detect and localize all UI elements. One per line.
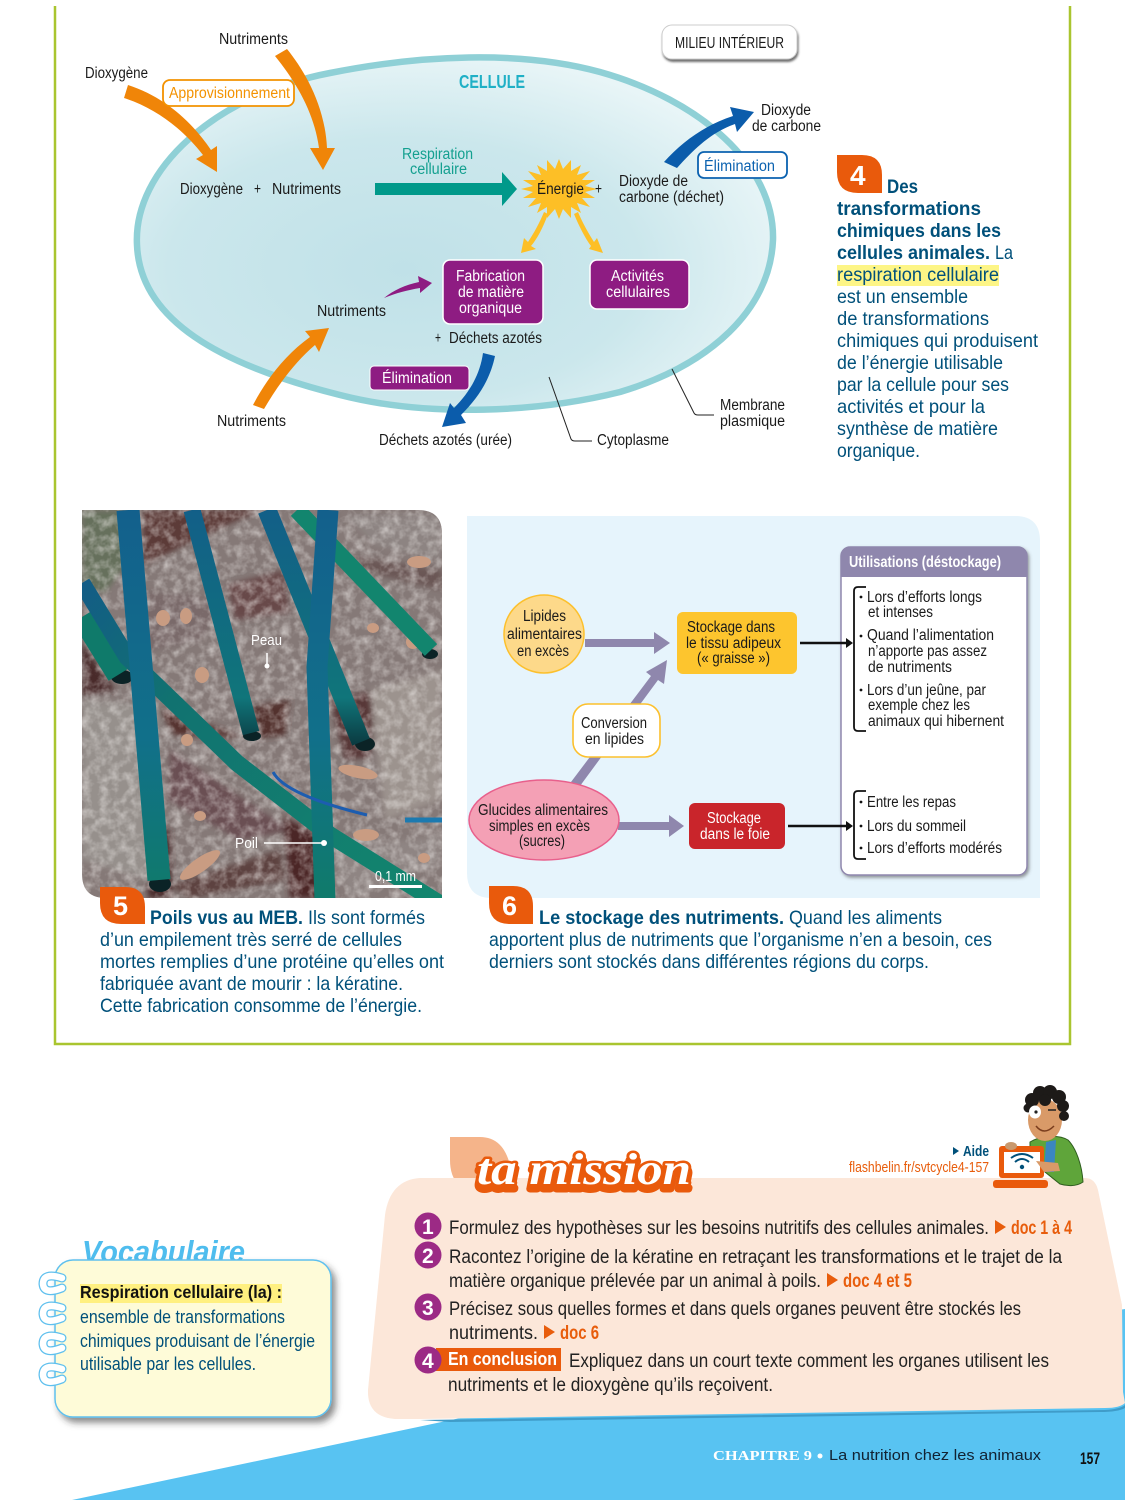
label: milieu intérieur: MILIEU INTÉRIEUR: [675, 35, 784, 52]
box: activités cellulaires: cellulaires: [606, 284, 670, 301]
arrow: nutriments from bottom: [217, 328, 329, 430]
flakes: [145, 556, 431, 884]
doc 4 text: activités et pour la: [837, 396, 985, 418]
arrow: respiration cellulaire: [375, 146, 517, 206]
title: vocabulaire: Vocabulaire: [82, 1234, 245, 1269]
doc 4 text: La: [995, 242, 1013, 264]
node: stockage tissu adipeux: Stockage dans: [687, 619, 775, 636]
note card: [55, 1260, 331, 1417]
question 4: Expliquez dans un court texte comment les organes utilisent les: [569, 1351, 1049, 1372]
label: déchets azotés: Déchets azotés: [449, 330, 542, 347]
box: activités cellulaires: Activités: [611, 268, 664, 285]
node: stockage foie: dans le foie: [700, 826, 770, 843]
node: glucides: (sucres): [519, 833, 565, 850]
panel: utilisations: Quand l’alimentation: [867, 627, 994, 644]
label: poil: [236, 837, 327, 848]
footer: chapter: CHAPITRE 9: [713, 1449, 812, 1464]
badge 6: [489, 886, 533, 924]
arrow: dioxygène from left: [85, 65, 217, 172]
diagram: cell: [85, 25, 821, 449]
number 4: [414, 1346, 442, 1374]
question 1: Formulez des hypothèses sur les besoins nutritifs des cellules animales.: [449, 1218, 989, 1239]
aide link: [849, 1144, 989, 1176]
panel: utilisations: Lors d’efforts longs: [867, 589, 982, 606]
footer: chapter: La nutrition chez les animaux: [829, 1447, 1042, 1464]
question 2: Racontez l’origine de la kératine en retraçant les transformations et le trajet de la: [449, 1247, 1062, 1268]
node: stockage foie: Stockage: [707, 810, 761, 827]
doc 5 caption: Cette fabrication consomme de l’énergie.: [100, 995, 422, 1017]
highlight: [837, 265, 999, 286]
doc 6 caption: [489, 886, 992, 973]
aide link: Aide: [963, 1144, 989, 1160]
doc 6 caption: Le stockage des nutriments.: [539, 907, 784, 929]
node: glucides: Glucides alimentaires: [478, 802, 608, 819]
title: ta mission: ta mission: [477, 1150, 691, 1199]
panel shadow: [420, 1405, 1125, 1422]
arrow: carbs conversion: [571, 660, 667, 786]
doc 4 text: [837, 155, 1039, 462]
products: +: [595, 181, 602, 198]
node: lipides: alimentaires: [507, 626, 582, 643]
panel: utilisations: animaux qui hibernent: [868, 713, 1005, 730]
panel: utilisations: Lors d’efforts modérés: [867, 840, 1002, 857]
arrows: energy to boxes: [521, 212, 603, 253]
label: membrane plasmique: [672, 369, 785, 430]
node: glucides: [469, 780, 619, 860]
arrow: lipids to adipose: [585, 632, 670, 654]
question 3: [449, 1299, 1021, 1344]
panel: utilisations: Lors d’un jeûne, par: [867, 682, 986, 699]
box: fabrication de matière organique: Fabrication: [456, 268, 525, 285]
question 4: [448, 1351, 1049, 1396]
doc 5 caption: fabriquée avant de mourir : la kératine.: [100, 973, 403, 995]
node: stockage tissu adipeux: (« graisse »): [697, 650, 770, 667]
cell membrane and cytoplasm: [137, 57, 773, 410]
scale bar: 0,1 mm: [375, 869, 416, 885]
reactants: Nutriments: [272, 181, 341, 198]
badge 5: [100, 887, 145, 924]
question 1: doc 1 à 4: [1011, 1218, 1072, 1239]
en conclusion tag: En conclusion: [448, 1349, 557, 1369]
arrow: respiration cellulaire: cellulaire: [410, 161, 467, 178]
doc 6 caption: Quand les aliments: [789, 907, 942, 929]
node: glucides: simples en excès: [489, 818, 590, 835]
doc 4 text: chimiques qui produisent: [837, 330, 1039, 352]
products: [595, 173, 724, 206]
doc 5 caption: Poils vus au MEB.: [150, 907, 303, 929]
doc 4 text: organique.: [837, 440, 920, 462]
definition text: ensemble de transformations: [80, 1307, 285, 1327]
diagram: nutrient storage: [467, 516, 1040, 898]
icon: energy star: Énergie: [537, 181, 584, 198]
arrow: déchets out: Déchets azotés (urée): [379, 432, 512, 449]
doc 6 caption: apportent plus de nutriments que l’organisme n’en a besoin, ces: [489, 929, 992, 951]
panel: vocabulaire: [43, 1234, 331, 1417]
arrow: respiration cellulaire: Respiration: [402, 146, 473, 163]
panel background: [368, 1178, 1125, 1419]
node: lipides: en excès: [517, 643, 569, 660]
brackets: [854, 587, 866, 859]
label: approvisionnement: Approvisionnement: [169, 85, 291, 102]
node: conversion: [573, 704, 660, 757]
question 3: nutriments.: [449, 1323, 538, 1344]
label: cellule: CELLULE: [459, 72, 525, 92]
box: activités cellulaires: [590, 260, 689, 309]
arrow: carbs to liver: [618, 815, 684, 837]
question 4: nutriments et le dioxygène qu’ils reçoivent.: [448, 1375, 773, 1396]
doc 4 text: est un ensemble: [837, 286, 968, 308]
doc 4 text: transformations: [837, 198, 981, 220]
panel: utilisations: Utilisations (déstockage): [849, 554, 1001, 571]
question 2: matière organique prélevée par un animal à poils.: [449, 1271, 821, 1292]
icon: character with laptop: [993, 1085, 1083, 1188]
badge 6: 6: [502, 891, 517, 921]
badge 4: 4: [850, 160, 866, 191]
box: fabrication de matière organique: [443, 260, 543, 324]
arrow: dioxygène from left: Dioxygène: [85, 65, 148, 82]
green page frame: [55, 6, 1070, 1044]
label: poil: Poil: [235, 835, 258, 852]
hairs: [111, 649, 438, 892]
box: fabrication de matière organique: organique: [459, 300, 522, 317]
scale bar: [369, 871, 422, 888]
label: nutriments: Nutriments: [317, 303, 386, 320]
label: cytoplasme: Cytoplasme: [597, 432, 669, 449]
arrow: nutriments from top: [219, 31, 335, 170]
doc 4 text: Des: [887, 176, 918, 198]
label: membrane plasmique: plasmique: [720, 413, 785, 430]
arrow: nutriments to fabrication: [384, 276, 432, 298]
aide link: flashbelin.fr/svtcycle4-157: [849, 1160, 989, 1176]
doc 5 caption: mortes remplies d’une protéine qu’elles ont: [100, 951, 445, 973]
definition text: [80, 1282, 315, 1374]
rings: [43, 1276, 62, 1382]
number 2: [414, 1242, 442, 1268]
panel: ta mission: [368, 1085, 1125, 1422]
doc 4 text: chimiques dans les: [837, 220, 1001, 242]
node: lipides: Lipides: [523, 608, 566, 625]
panel: utilisations: Entre les repas: [867, 794, 956, 811]
panel: utilisations: exemple chez les: [868, 697, 970, 714]
number 4: 4: [422, 1350, 434, 1373]
node: lipides: [504, 595, 584, 673]
panel: utilisations: de nutriments: [868, 659, 952, 676]
question 3: Précisez sous quelles formes et dans quels organes peuvent être stockés les: [449, 1299, 1021, 1320]
node: conversion: en lipides: [585, 731, 644, 748]
icon: energy star: [521, 159, 597, 219]
reactants: Dioxygène: [180, 181, 243, 198]
definition text: Respiration cellulaire (la) :: [80, 1282, 282, 1302]
arrow: nutriments from bottom: Nutriments: [217, 413, 286, 430]
definition text: chimiques produisant de l’énergie: [80, 1331, 315, 1351]
arrow: nutriments from top: Nutriments: [219, 31, 288, 48]
node: stockage tissu adipeux: [677, 612, 797, 674]
panel: utilisations: n’apporte pas assez: [868, 643, 987, 660]
definition text: utilisable par les cellules.: [80, 1354, 256, 1374]
doc 5 caption: [100, 887, 445, 1017]
node: conversion: Conversion: [581, 715, 647, 732]
doc 4 text: cellules animales.: [837, 242, 990, 264]
label: élimination purple: Élimination: [382, 370, 452, 387]
label: peau: [252, 635, 282, 668]
doc 4 text: respiration cellulaire: [837, 264, 999, 286]
number 3: [414, 1294, 442, 1320]
node: stockage tissu adipeux: le tissu adipeux: [686, 635, 781, 652]
number 2: 2: [422, 1245, 434, 1268]
doc 4 text: par la cellule pour ses: [837, 374, 1009, 396]
node: stockage foie: [689, 803, 785, 849]
doc 5 caption: d’un empilement très serré de cellules: [100, 929, 402, 951]
doc 4 text: de l’énergie utilisable: [837, 352, 1003, 374]
label: cytoplasme: [549, 377, 669, 449]
arrows: storage to uses: [788, 638, 853, 831]
label: élimination purple: [370, 366, 469, 390]
arrow: déchets out: [379, 353, 512, 449]
question 2: doc 4 et 5: [843, 1271, 912, 1292]
label: élimination blue: Élimination: [704, 158, 775, 175]
products: Dioxyde de: [619, 173, 688, 190]
question 3: doc 6: [560, 1323, 599, 1344]
panel: utilisations: et intenses: [868, 604, 933, 621]
label: élimination blue: [698, 152, 787, 178]
products: carbone (déchet): [619, 189, 724, 206]
title tab: [450, 1137, 510, 1193]
number 1: [414, 1212, 442, 1240]
question 2: [449, 1247, 1062, 1292]
arrow: dioxyde de carbone out: Dioxyde: [761, 102, 811, 119]
footer: chapter: [713, 1447, 1042, 1464]
number 3: 3: [422, 1297, 434, 1320]
photo: hairs under electron microscope: [82, 510, 442, 905]
label: approvisionnement: [163, 80, 294, 106]
arrow: dioxyde de carbone out: [664, 102, 821, 168]
badge 4: [837, 155, 882, 193]
doc 5 caption: Ils sont formés: [308, 907, 425, 929]
footer blue band: [72, 1309, 1125, 1500]
panel background: [467, 516, 1040, 898]
label: membrane plasmique: Membrane: [720, 397, 785, 414]
panel: utilisations: [841, 547, 1027, 875]
box: fabrication de matière organique: de matière: [458, 284, 524, 301]
reactants: +: [254, 181, 261, 198]
doc 4 text: de transformations: [837, 308, 989, 330]
arrow: dioxyde de carbone out: de carbone: [752, 118, 821, 135]
doc 4 text: synthèse de matière: [837, 418, 998, 440]
panel: utilisations: Lors du sommeil: [867, 818, 966, 835]
reactants: [180, 181, 341, 198]
label: déchets azotés: +: [435, 330, 441, 347]
doc 6 caption: derniers sont stockés dans différentes régions du corps.: [489, 951, 929, 973]
number 1: 1: [422, 1216, 434, 1239]
title: ta mission: ta mission: [477, 1145, 691, 1194]
label: peau: Peau: [251, 632, 282, 649]
badge 5: 5: [113, 891, 128, 921]
footer: page number: 157: [1080, 1449, 1100, 1468]
label: milieu intérieur: [662, 25, 797, 59]
